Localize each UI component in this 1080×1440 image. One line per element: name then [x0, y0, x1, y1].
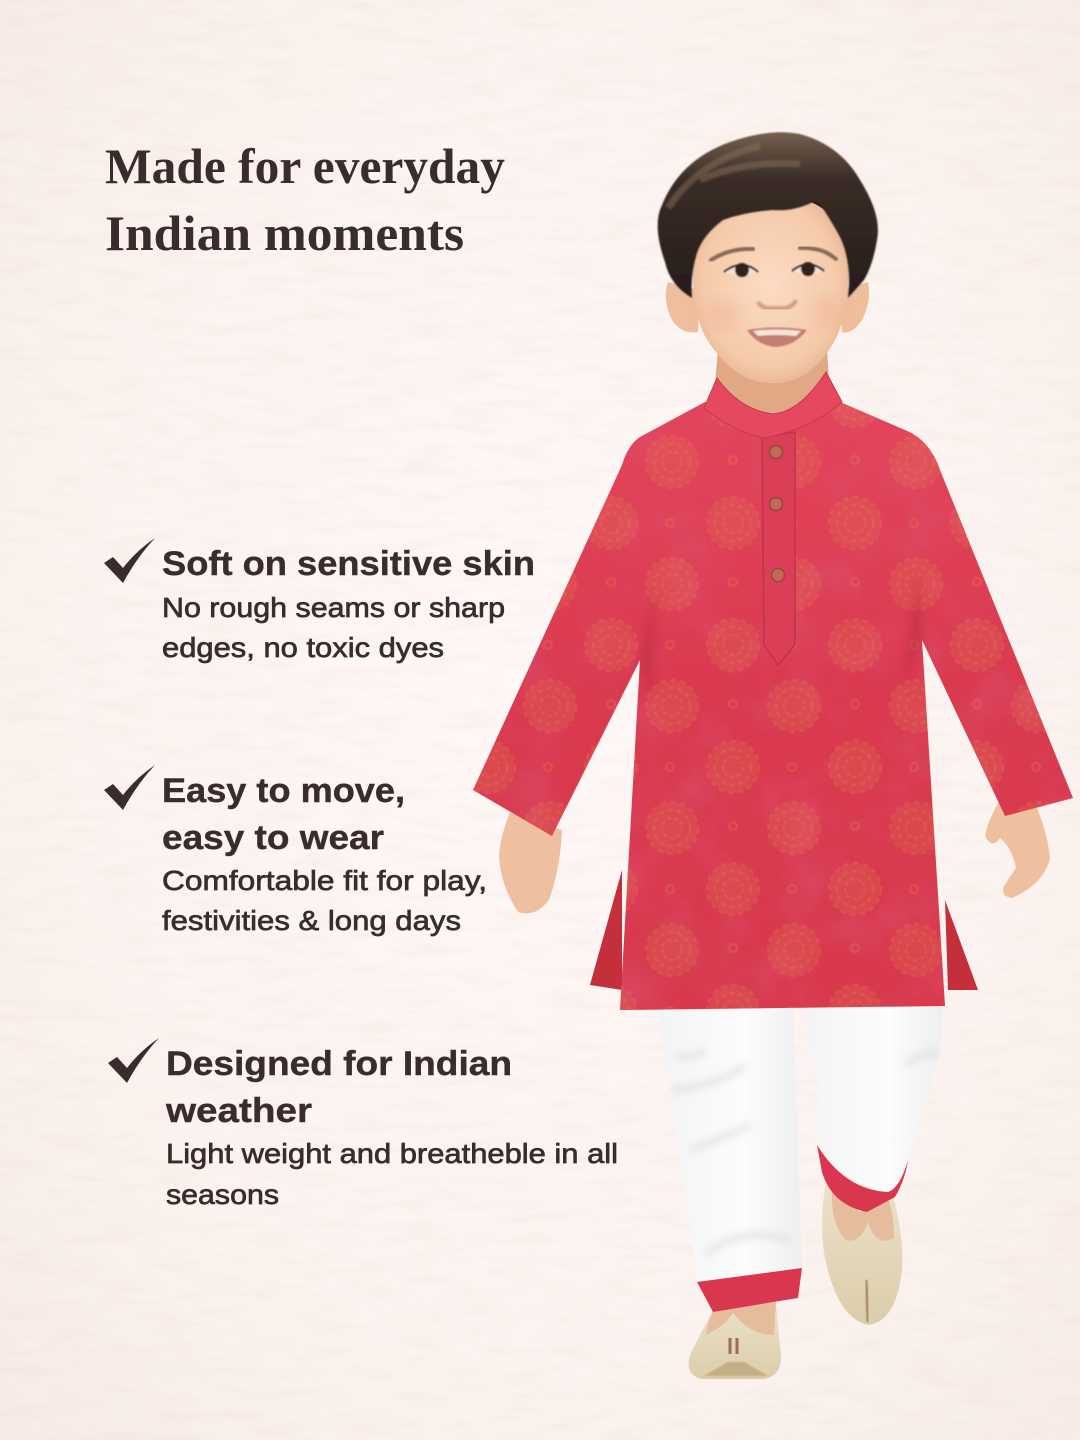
neck [714, 350, 830, 425]
benefit: designed for Indian weather [108, 1038, 618, 1210]
head [658, 132, 878, 383]
title: Made for everyday [105, 138, 505, 194]
hair [658, 132, 878, 298]
collar [704, 372, 842, 438]
benefit: easy to move, easy to wear: Easy to move, [162, 772, 405, 810]
icon: check mark [104, 538, 155, 583]
cheeks [704, 297, 844, 330]
kurta placket [762, 432, 795, 665]
benefit: soft on sensitive skin: Soft on sensitive skin [162, 545, 535, 583]
buttons [770, 446, 784, 582]
trousers [658, 1006, 943, 1282]
benefit: easy to move, easy to wear [104, 765, 487, 936]
kurta [460, 370, 1080, 1020]
nose [758, 300, 796, 308]
shoe: right foot [822, 1180, 902, 1325]
hands [499, 795, 1050, 914]
benefit: soft on sensitive skin: No rough seams or sharp [162, 592, 505, 623]
icon: check mark [104, 765, 155, 810]
benefit: easy to move, easy to wear: Comfortable fit for play, [162, 865, 487, 896]
benefit: soft on sensitive skin: edges, no toxic dyes [162, 632, 444, 663]
benefit: easy to move, easy to wear: easy to wear [162, 819, 384, 857]
benefit: designed for Indian weather: weather [165, 1092, 312, 1130]
benefit: easy to move, easy to wear: festivities & long days [162, 905, 461, 936]
face [692, 194, 849, 383]
shoe: left foot [688, 1302, 781, 1379]
hair back [690, 180, 856, 260]
icon: check mark [108, 1038, 159, 1083]
benefit: designed for Indian weather: seasons [166, 1179, 279, 1210]
trouser cuffs [697, 1145, 908, 1312]
smile [747, 328, 807, 347]
kurta side slits [590, 870, 978, 990]
eyebrows [711, 248, 836, 260]
title: Indian moments [105, 205, 464, 261]
benefit: soft on sensitive skin [104, 538, 535, 663]
title [105, 138, 505, 261]
eyes [724, 262, 824, 277]
benefit: designed for Indian weather: Light weight and breatheble in all [166, 1138, 618, 1169]
benefit: designed for Indian weather: Designed for Indian [166, 1045, 512, 1083]
ears [666, 282, 869, 332]
illustration: smiling boy in red kurta [460, 132, 1080, 1379]
